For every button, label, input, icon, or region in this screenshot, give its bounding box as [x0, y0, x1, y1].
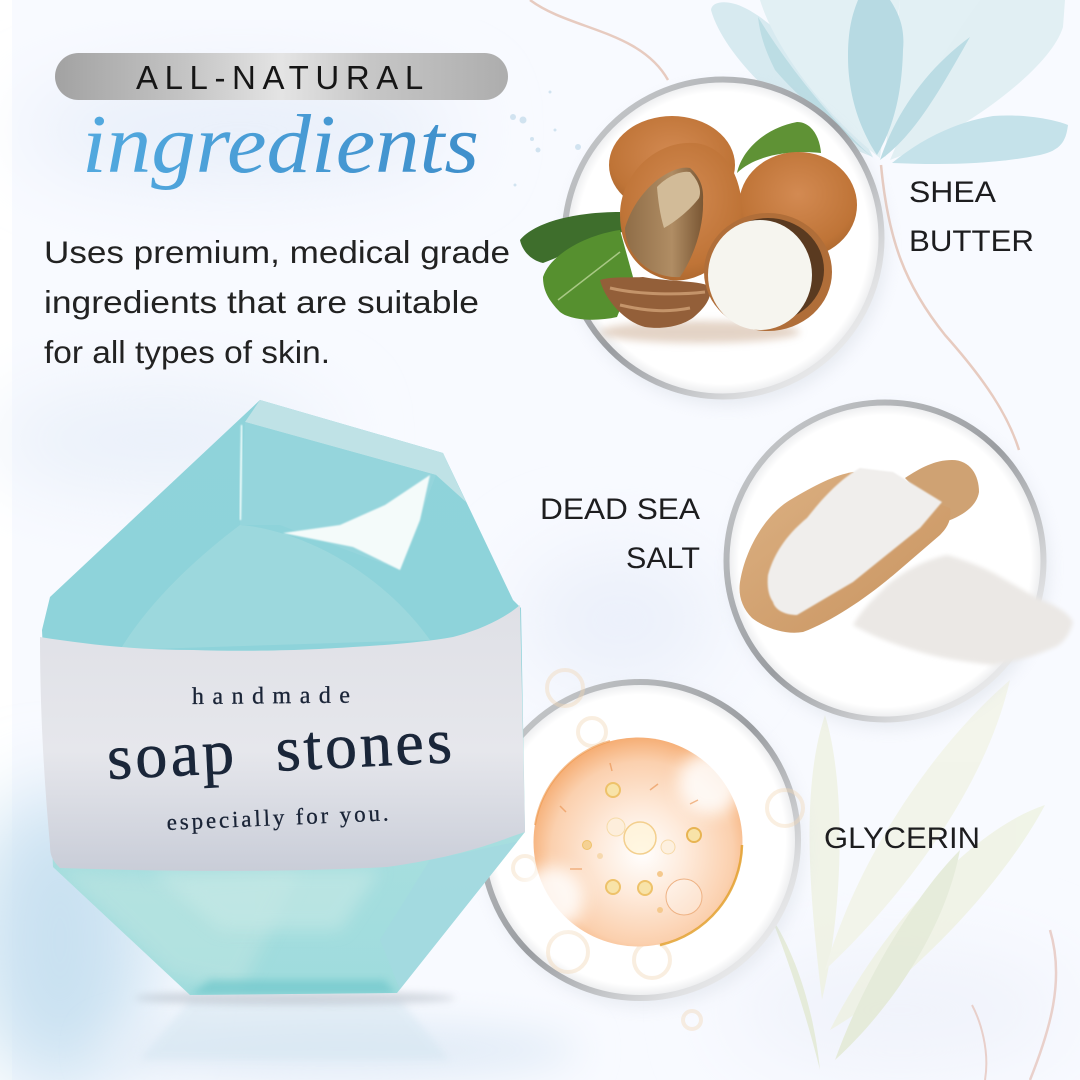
dish: glycerin [482, 670, 804, 1029]
heading pill [55, 53, 508, 100]
soap highlight [283, 475, 430, 570]
icon: glycerin drop [520, 738, 742, 946]
description text: for all types of skin. [44, 334, 330, 370]
paint spatter dots [510, 90, 581, 186]
icon: shell fragment [600, 277, 710, 328]
icon: back shea nuts [609, 116, 857, 258]
soap label band: especially for you. [166, 800, 389, 835]
label: shea butter: SHEA [909, 176, 996, 209]
icon: cracked shea nut [620, 143, 742, 281]
icon: salt pile [853, 555, 1073, 665]
description text: ingredients that are suitable [44, 284, 479, 320]
heading: ingredients: ingredients [82, 98, 479, 191]
soap label band: soap stones [105, 705, 453, 793]
soap body [42, 400, 525, 995]
decorative oil rings [513, 670, 803, 1029]
label: shea butter [909, 176, 1034, 258]
icon: left leaves [520, 212, 633, 320]
label: shea butter: BUTTER [909, 225, 1034, 258]
description text: Uses premium, medical grade [44, 234, 510, 270]
icon: open shea nut with butter [704, 213, 832, 331]
icon: top leaf [737, 122, 821, 173]
description text [44, 234, 510, 370]
soap facets [60, 400, 525, 995]
icon: salt in scoop [768, 468, 942, 615]
decorative leaves bottom right [770, 680, 1056, 1080]
soap label band: handmade [192, 683, 350, 710]
soap reflection and shadow [135, 991, 455, 1060]
pink stems [530, 0, 1019, 450]
soap stone product [40, 400, 525, 995]
decorative lotus flower top right [711, 0, 1068, 164]
heading: all-natural: ALL-NATURAL [136, 59, 427, 96]
dish: shea butter [520, 80, 887, 405]
soap label band [40, 605, 525, 871]
dish: dead sea salt [726, 402, 1073, 728]
label: dead sea salt: SALT [626, 542, 700, 575]
label: glycerin: GLYCERIN [824, 822, 980, 855]
label: dead sea salt [540, 493, 700, 575]
label: dead sea salt: DEAD SEA [540, 493, 700, 526]
icon: wooden scoop [740, 460, 979, 633]
